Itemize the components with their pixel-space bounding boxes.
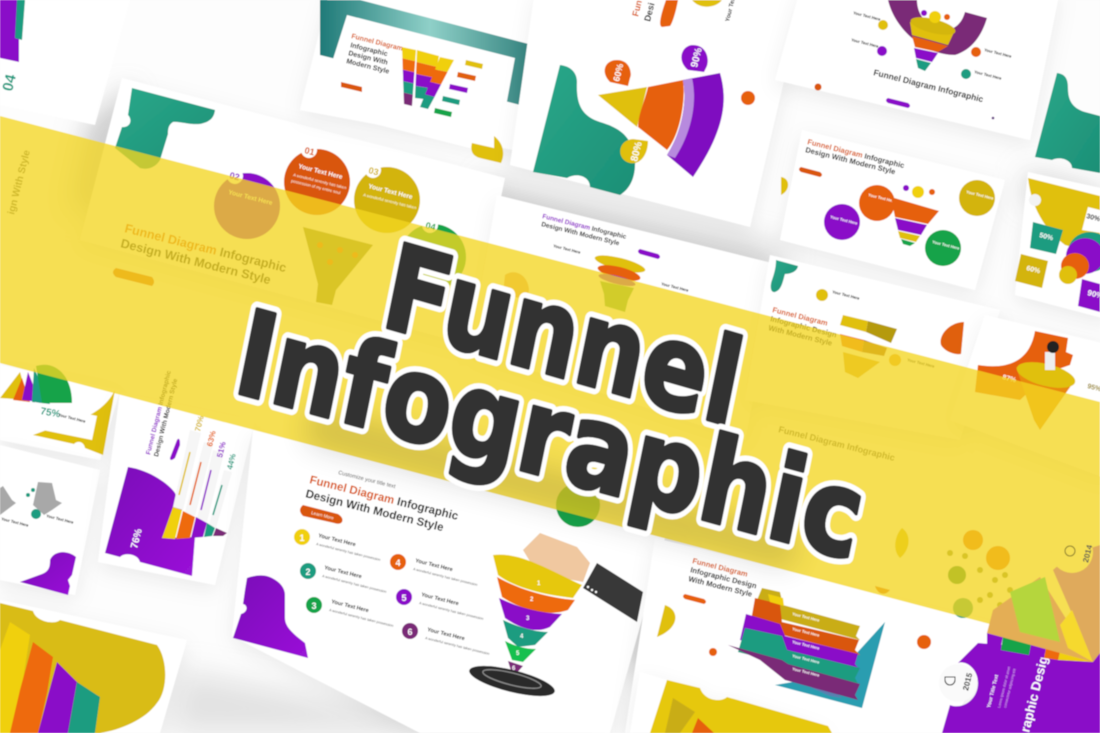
yellow half	[657, 605, 675, 637]
button	[683, 594, 706, 604]
numbered items: 2	[305, 567, 311, 577]
purple arc	[888, 0, 987, 55]
columns: 44%	[225, 453, 238, 470]
funnel with hand: 6	[512, 666, 516, 672]
funnel with hand: 5	[516, 651, 520, 657]
numbered items: 4	[395, 558, 401, 568]
card: purple arc slide	[775, 0, 1060, 140]
title line 1: Funnel: Funnel	[373, 218, 753, 454]
circles: Your Text Here	[966, 189, 995, 201]
card: ribbon slide	[625, 538, 1010, 733]
purple shape	[105, 467, 195, 576]
orange backdrop	[975, 331, 1073, 400]
heading: Infographic Design	[690, 565, 758, 590]
yellow corner shape	[471, 136, 503, 163]
circles: Your Text Here	[830, 214, 859, 226]
ribbons: Your Text Here	[792, 611, 821, 623]
faded heading under band: Funnel Diagram Infographic	[778, 424, 896, 463]
card: gray funnels: Your Text Here	[1, 516, 30, 528]
card: four circles slide	[780, 130, 1005, 290]
small teal blob	[771, 260, 798, 292]
purple slide: Your Title Text	[986, 674, 1000, 708]
dots	[709, 635, 931, 656]
funnel	[593, 252, 647, 312]
heading	[768, 305, 838, 348]
ribbons: Your Text Here	[792, 626, 821, 638]
numbered items: 1	[299, 533, 305, 543]
title line 2: Infographic: Infographic	[225, 283, 875, 587]
button	[799, 167, 822, 177]
numbered items	[294, 529, 490, 656]
drop labels: 90%	[689, 47, 705, 69]
button: learn more	[300, 505, 342, 524]
purple slide: consectetur adipiscing elit	[1003, 668, 1017, 708]
ribbons: Your Text Here	[792, 653, 821, 665]
numbered items: Your Text Here	[331, 599, 369, 614]
ribbons	[728, 588, 860, 700]
card: astronaut slide: 87%	[1002, 374, 1018, 385]
ribbons: Your Text Here	[792, 666, 821, 678]
circle 03	[354, 162, 420, 233]
heading: Infographic Design	[770, 314, 838, 339]
numbered items: A wonderful serenity has taken possession	[329, 608, 394, 628]
purple blob	[233, 575, 308, 658]
top fragment text	[630, 0, 737, 27]
green half circle	[556, 483, 600, 527]
card: stacked boxes slide: Your Text Here	[832, 289, 861, 301]
circle 02: Your Text Here	[228, 189, 274, 207]
funnel	[891, 185, 939, 246]
circle 02	[214, 168, 280, 239]
circle 03: A wonderful serenity has taken	[363, 192, 417, 210]
ribbons: Your Text Here	[792, 639, 821, 651]
card: bottom-left ribbons	[0, 600, 187, 733]
bullet items	[851, 10, 1013, 81]
numbered items: A wonderful serenity has taken possession	[316, 542, 381, 562]
orange dot	[741, 91, 755, 105]
figure	[808, 680, 842, 698]
heading: Funnel Diagram Infographic	[308, 474, 460, 523]
heading: Funnel Diagram Infographic	[123, 221, 288, 275]
card: funnel circles slide	[80, 78, 505, 345]
circle 04	[400, 217, 466, 290]
funnel with hand: 2	[530, 597, 534, 603]
circles	[824, 180, 995, 266]
circles: Your Text Here	[932, 239, 961, 251]
card: gray funnels: Your Text Here	[46, 513, 75, 525]
circle 01: possession of my entire soul	[291, 178, 341, 195]
funnel with hand: 3	[526, 616, 530, 622]
circle 01	[284, 142, 350, 215]
numbered items: Your Text Here	[318, 533, 356, 548]
heading	[688, 556, 758, 599]
heading: Funnel Diagram Infographic	[542, 213, 627, 241]
right teal blob	[1035, 73, 1100, 173]
funnel segments	[162, 507, 227, 539]
orange half	[941, 322, 964, 354]
funnel with hand: 4	[520, 634, 524, 640]
heading: Design With	[348, 50, 388, 67]
columns	[173, 415, 238, 528]
slide title: raphic Design	[1017, 647, 1053, 733]
button	[886, 98, 910, 108]
ribbons	[0, 622, 100, 733]
card: gray funnels	[0, 445, 100, 595]
yellow dot item	[816, 289, 828, 301]
heading: Funnel Diagram	[692, 556, 749, 579]
card: cone slide	[510, 0, 805, 227]
squares	[1015, 222, 1100, 312]
numbered items: Your Text Here	[421, 592, 459, 607]
circles: Your Text Here	[868, 192, 897, 204]
card: top centre sea slide	[300, 0, 660, 170]
bullet items: Your Text Here	[984, 47, 1013, 59]
column funnel	[402, 47, 454, 109]
astronaut	[1045, 341, 1059, 370]
card: centre funnel slide	[470, 195, 780, 440]
card: KPI squares slide	[1015, 172, 1100, 320]
heading: Infographic	[350, 42, 388, 58]
heading: Funnel Diagram Infographic	[873, 67, 985, 104]
card: top-left fragment: ign With Style	[6, 149, 33, 216]
tooltip	[1082, 207, 1100, 233]
funnel with hand: 1	[537, 581, 541, 587]
numbered items: A wonderful serenity has taken possession	[322, 574, 387, 594]
card: stacked boxes slide: Your Text Here	[907, 357, 936, 369]
yellow half	[781, 177, 788, 195]
heading: With Modern Style	[688, 574, 753, 599]
heading: Design With Modern Style	[153, 378, 179, 457]
heading: Design With Modern Style	[541, 221, 620, 247]
bullet items: Your Text Here	[853, 10, 882, 22]
dots	[814, 84, 994, 119]
purple blob	[20, 552, 76, 595]
heading: Design With Modern Style	[119, 236, 272, 287]
3d boxes	[840, 315, 897, 378]
tooltip: Your Text Here	[58, 412, 87, 424]
circle 01: 01	[304, 145, 316, 157]
tagline: Customize your title text	[338, 470, 396, 490]
numbered items: A wonderful serenity has taken possession	[419, 601, 484, 621]
bottom yellow piece	[630, 672, 832, 733]
drop labels: 60%	[611, 63, 625, 82]
card: horizontal funnel slide: 76%	[129, 528, 145, 550]
card: main funnel slide	[232, 430, 665, 733]
numbered items: 6	[407, 627, 413, 637]
card: top-left fragment	[0, 0, 130, 216]
year badge 2014	[1051, 531, 1094, 573]
card: centre funnel slide: Your Text Here	[553, 243, 582, 255]
heading	[346, 33, 404, 76]
tooltip	[33, 402, 97, 440]
columns: 63%	[205, 430, 218, 447]
top fragment text: Desi	[642, 2, 657, 22]
card: astronaut slide	[950, 315, 1100, 480]
circle 03: 03	[368, 165, 380, 177]
teal blob	[533, 65, 635, 195]
button	[638, 249, 660, 259]
title line 1: Funnel: Funnel	[373, 218, 753, 454]
squares: 50%	[1039, 232, 1055, 243]
button	[341, 82, 362, 92]
columns: 51%	[215, 441, 228, 458]
year badge 2014: 2014	[1081, 544, 1094, 563]
purple slide: Lorem ipsum dolor sit amet	[997, 666, 1011, 708]
title	[225, 218, 875, 587]
faded funnel	[303, 227, 373, 305]
heading: Design With Modern Style	[304, 488, 445, 534]
heading: Funnel Diagram Infographic	[145, 370, 173, 455]
yellow band	[0, 116, 1100, 653]
drop labels	[605, 45, 708, 163]
teal triangle	[775, 622, 885, 708]
heading: Modern Style	[346, 58, 390, 76]
heading: With Modern Style	[768, 323, 833, 348]
circle 04: 04	[425, 220, 437, 232]
bullet items: Your Text Here	[851, 37, 880, 49]
brown blob	[503, 272, 529, 300]
numbered items: Your Text Here	[415, 558, 453, 573]
numbered items: A wonderful serenity has taken possession	[425, 636, 490, 656]
heading: Design With Modern Style	[805, 145, 896, 176]
fan over band	[987, 545, 1100, 662]
funnel	[909, 10, 957, 71]
title line 2: Infographic: Infographic	[225, 283, 875, 587]
circle 02: 02	[229, 170, 241, 182]
funnel	[1014, 357, 1078, 430]
card: rainbow cone	[0, 365, 120, 460]
card: horizontal funnel slide	[98, 370, 255, 585]
heading: Funnel Diagram	[351, 33, 404, 53]
button: learn more: Learn More	[311, 510, 335, 521]
year badge: 2015	[961, 672, 974, 691]
button	[113, 268, 154, 286]
drop labels: 80%	[629, 141, 645, 163]
card: centre funnel slide: Your Text Here	[661, 281, 690, 293]
funnel with hand	[467, 533, 643, 702]
numbered items: 5	[401, 593, 407, 603]
card: stacked boxes slide	[745, 255, 1000, 440]
squares: 60%	[1026, 265, 1042, 276]
numbered items: Your Text Here	[324, 565, 362, 580]
tooltip: 75%	[39, 406, 61, 420]
numbered items: 3	[311, 601, 317, 611]
year badge	[939, 664, 977, 702]
band shadow from cards below	[305, 405, 800, 570]
fan bottom row	[987, 633, 1093, 662]
heading: Funnel Diagram	[772, 305, 829, 328]
button	[170, 439, 180, 460]
teal blob	[115, 88, 215, 169]
faded social icons under band	[875, 528, 1013, 618]
columns: 70%	[193, 415, 206, 432]
circle 03: Your Text Here	[368, 183, 414, 201]
labels list	[434, 60, 483, 117]
numbered items: Your Text Here	[427, 627, 465, 642]
cone segments	[598, 73, 724, 177]
circle 01: A wonderful serenity has taken	[293, 172, 347, 190]
numbered items: A wonderful serenity has taken possession	[413, 567, 478, 587]
card: top-left fragment: 04	[0, 72, 20, 93]
bullet items: Your Text Here	[974, 69, 1003, 81]
heading: Funnel Diagram Infographic	[807, 137, 905, 170]
circle 01: Your Text Here	[298, 163, 344, 181]
purple slide	[939, 633, 1100, 733]
stacked cone	[1059, 232, 1100, 284]
